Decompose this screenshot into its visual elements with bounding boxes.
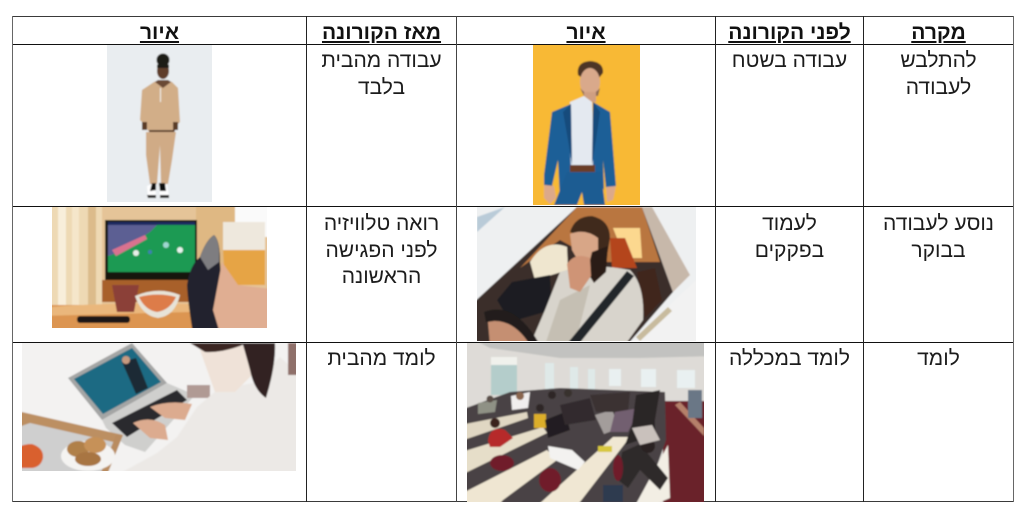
heading: since corona: מאז הקורונה — [322, 21, 441, 44]
text: commuting in the morning — [883, 212, 994, 262]
text: studies in college: לומד במכללה — [729, 347, 850, 370]
text: get dressed for work: לעבודה — [906, 76, 971, 98]
illustration: woman studying online on a laptop — [22, 343, 296, 471]
text: studies: לומד — [917, 347, 960, 370]
illustration: watching football on tv with beer — [52, 207, 267, 328]
text: watches tv before the first meeting — [324, 212, 439, 288]
text: work from home only — [321, 49, 442, 98]
text: stuck in traffic: לעמוד — [762, 212, 817, 235]
text: watches tv before the first meeting: הראשונה — [342, 265, 421, 288]
text: watches tv before the first meeting: לפני הפגישה — [325, 238, 438, 262]
illustration: man in blue suit — [533, 45, 640, 205]
text: get dressed for work: להתלבש — [900, 49, 977, 72]
text: work from home only: עבודה מהבית — [321, 49, 442, 72]
text: watches tv before the first meeting: רואה טלוויזיה — [324, 212, 439, 235]
text: stuck in traffic — [755, 212, 824, 262]
text: commuting in the morning: בבוקר — [911, 238, 966, 262]
heading: before corona: לפני הקורונה — [728, 21, 851, 44]
illustration: man in casual tan tracksuit — [107, 45, 212, 202]
text: field work: עבודה בשטח — [732, 49, 847, 72]
heading: illustration since: איור — [140, 21, 179, 44]
heading: case: מקרה — [911, 21, 966, 44]
heading: illustration before: איור — [566, 21, 606, 44]
text: stuck in traffic: בפקקים — [755, 238, 824, 262]
text: work from home only: בלבד — [358, 76, 405, 98]
text: commuting in the morning: נוסע לעבודה — [883, 212, 994, 235]
text: get dressed for work — [900, 49, 977, 98]
illustration: students in college lecture hall — [467, 343, 704, 502]
text: studies from home: לומד מהבית — [327, 347, 436, 370]
illustration: man yawning while driving — [477, 207, 696, 341]
